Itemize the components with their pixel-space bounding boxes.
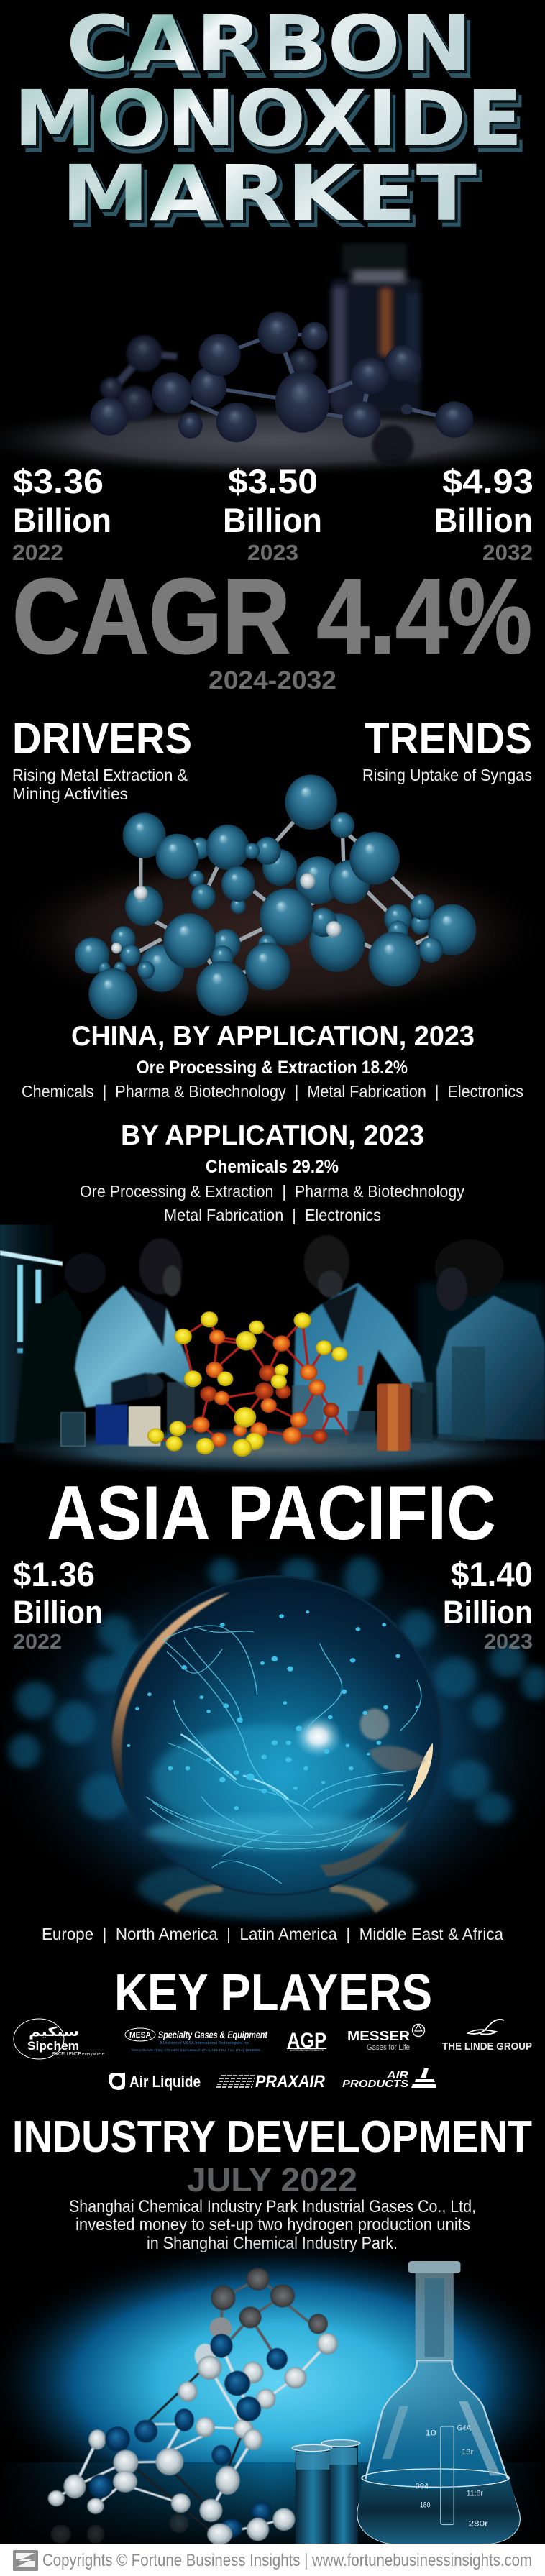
title line: CARBON: CARBON: [66, 0, 472, 89]
stat: Asia Pacific 2023: [443, 1555, 533, 1654]
logo: Air Liquide: [109, 2073, 201, 2091]
stat: Asia Pacific 2022: [13, 1555, 103, 1654]
logo: Messer: MESSER: [347, 2029, 410, 2043]
logo: Praxair: [216, 2072, 326, 2091]
logo: Air Products: PRODUCTS: [342, 2078, 408, 2090]
logo: Sipchem: سبكيم: [29, 2025, 79, 2039]
stat: 2022 market value: Billion: [13, 501, 111, 539]
test tubes: [293, 2440, 359, 2544]
bokeh background: [0, 1518, 545, 1928]
image: blue molecule: [0, 774, 545, 1022]
logo: Praxair: PRAXAIR: [255, 2072, 326, 2091]
title: Carbon Monoxide Market: [14, 0, 528, 245]
global segment list: Metal Fabrication | Electronics: [164, 1206, 381, 1224]
China leading segment: Ore Processing & Extraction 18.2%: [137, 1058, 408, 1078]
scientist silhouette, far left: [14, 1253, 106, 1451]
network filaments: [146, 1626, 421, 1884]
title line: CARBON: CARBON: [69, 3, 475, 92]
stat: Asia Pacific 2023: $1.40: [451, 1555, 533, 1593]
image: scientists around a molecule in a lab: [0, 1225, 545, 1488]
scientist, centre: [292, 1235, 428, 1449]
hero image: dark molecule and bottle on floor: [0, 244, 545, 477]
logo: Sipchem: EXCELLENCE everywhere: [52, 2052, 104, 2057]
logo: MESA: Domestic US: (866) 470-6372 International: (714) 434-7102 Fax: (714) 434-8006: [132, 2048, 261, 2052]
stat: Asia Pacific 2022: $1.36: [13, 1555, 95, 1593]
molecule model: [48, 2268, 338, 2545]
flask scale markings: [416, 2423, 488, 2528]
stat: 2032 market value: [434, 462, 533, 565]
region list: Europe | North America | Latin America | Middle East & Africa: [42, 1925, 503, 1943]
logo: Sipchem: [14, 2019, 104, 2059]
scientist, left: [75, 1238, 191, 1408]
lab table: [0, 1429, 545, 1483]
flask scale markings: 180: [420, 2500, 431, 2509]
flask scale markings: G4A: [457, 2423, 471, 2432]
China segment list: Chemicals | Pharma & Biotechnology | Metal Fabrication | Electronics: [22, 1082, 523, 1101]
flask: [357, 2261, 520, 2544]
logo: MESA: [125, 2028, 268, 2052]
stat: 2023 market value: [223, 462, 322, 565]
logo: The Linde Group: THE LINDE GROUP: [442, 2040, 532, 2053]
glassware: [61, 1347, 485, 1451]
orange and yellow molecule: [147, 1311, 347, 1457]
stat: Asia Pacific 2023: 2023: [484, 1631, 533, 1654]
trend description: Rising Uptake of Syngas: [362, 766, 532, 784]
lab wall panel: [0, 1225, 545, 1443]
development description: [69, 2197, 476, 2253]
stat: 2022 market value: 2022: [12, 540, 63, 565]
stat: 2032 market value: $4.93: [442, 462, 533, 500]
flask scale markings: 10: [425, 2428, 436, 2437]
global segment list: [80, 1182, 464, 1224]
logo: Air Products: AIR: [386, 2069, 408, 2081]
driver description: [12, 766, 188, 803]
title line: MARKET: MARKET: [66, 156, 482, 245]
title line: CARBON: CARBON: [71, 6, 477, 96]
flask scale markings: 094: [416, 2481, 429, 2490]
stat: 2022 market value: [12, 462, 111, 565]
scientist, right: [434, 1239, 545, 1440]
heading: trends: TRENDS: [365, 714, 532, 763]
driver description: Mining Activities: [12, 784, 128, 803]
logo: Messer: [347, 2025, 424, 2052]
heading: drivers: DRIVERS: [12, 714, 192, 763]
global segment list: Ore Processing & Extraction | Pharma & Biotechnology: [80, 1182, 464, 1201]
footer logo: [13, 2550, 38, 2571]
stat: 2032 market value: Billion: [434, 501, 533, 539]
stat: 2023 market value: 2023: [247, 540, 298, 565]
stat: 2032 market value: 2032: [482, 540, 533, 565]
logo: AGP: AGP: [287, 2029, 326, 2053]
flask scale markings: 280r: [469, 2518, 488, 2528]
logo: AGP: AMERICAN GAS PRODUCTS: [290, 2049, 324, 2052]
driver description: Rising Metal Extraction &: [12, 766, 188, 784]
stat: Asia Pacific 2023: Billion: [443, 1594, 533, 1631]
logo: Air Products: [342, 2068, 436, 2090]
global leading segment: Chemicals 29.2%: [206, 1157, 339, 1177]
title line: MARKET: MARKET: [61, 150, 477, 239]
development description: invested money to set-up two hydrogen production units: [75, 2215, 470, 2234]
title line: MONOXIDE: MONOXIDE: [19, 81, 528, 170]
flask scale markings: 13r: [462, 2447, 474, 2456]
title line: MARKET: MARKET: [64, 152, 480, 242]
image: molecule model and laboratory flask: [0, 2238, 545, 2545]
CAGR period: 2024-2032: [209, 666, 336, 695]
title line: MONOXIDE: MONOXIDE: [17, 78, 526, 167]
image: glass globe with glowing network: [0, 1518, 545, 1928]
stat: Asia Pacific 2022: Billion: [13, 1594, 103, 1631]
development description: Shanghai Chemical Industry Park Industrial Gases Co., Ltd,: [69, 2197, 476, 2217]
logo: MESA: Specialty Gases & Equipment: [158, 2029, 268, 2040]
stat: 2022 market value: $3.36: [13, 462, 104, 500]
globe: [111, 1577, 441, 1895]
flask scale markings: 11:6r: [467, 2488, 483, 2498]
logo: MESA: A Division of MESA International Technologies, Inc.: [160, 2041, 250, 2045]
title line: MONOXIDE: MONOXIDE: [14, 75, 523, 164]
dark molecule: [91, 312, 473, 467]
logo: The Linde Group: [442, 2020, 532, 2053]
stat: Asia Pacific 2022: 2022: [13, 1631, 62, 1654]
blue glow backdrop: [0, 2238, 545, 2544]
logo: Air Liquide: Air Liquide: [129, 2073, 201, 2091]
network dots: [127, 1610, 418, 1810]
heading: Asia Pacific: ASIA PACIFIC: [47, 1470, 496, 1556]
stat: 2023 market value: Billion: [223, 501, 322, 539]
hot core: [293, 1715, 342, 1758]
development description: in Shanghai Chemical Industry Park.: [147, 2234, 398, 2253]
heading: key players: KEY PLAYERS: [114, 1964, 432, 2022]
development date: JULY 2022: [187, 2161, 357, 2199]
stat: 2023 market value: $3.50: [228, 462, 318, 500]
rim reflections: [112, 1592, 229, 1791]
heading: by application: BY APPLICATION, 2023: [121, 1120, 424, 1151]
logo: Sipchem: Sipchem: [27, 2039, 79, 2053]
bottle: [332, 244, 421, 413]
footer bar: [0, 2544, 545, 2576]
base glow under globe: [137, 1856, 416, 1919]
heading: China by application: CHINA, BY APPLICATION, 2023: [71, 1021, 475, 1052]
logo: Messer: Gases for Life: [367, 2043, 410, 2052]
logo: MESA: MESA: [129, 2031, 151, 2040]
